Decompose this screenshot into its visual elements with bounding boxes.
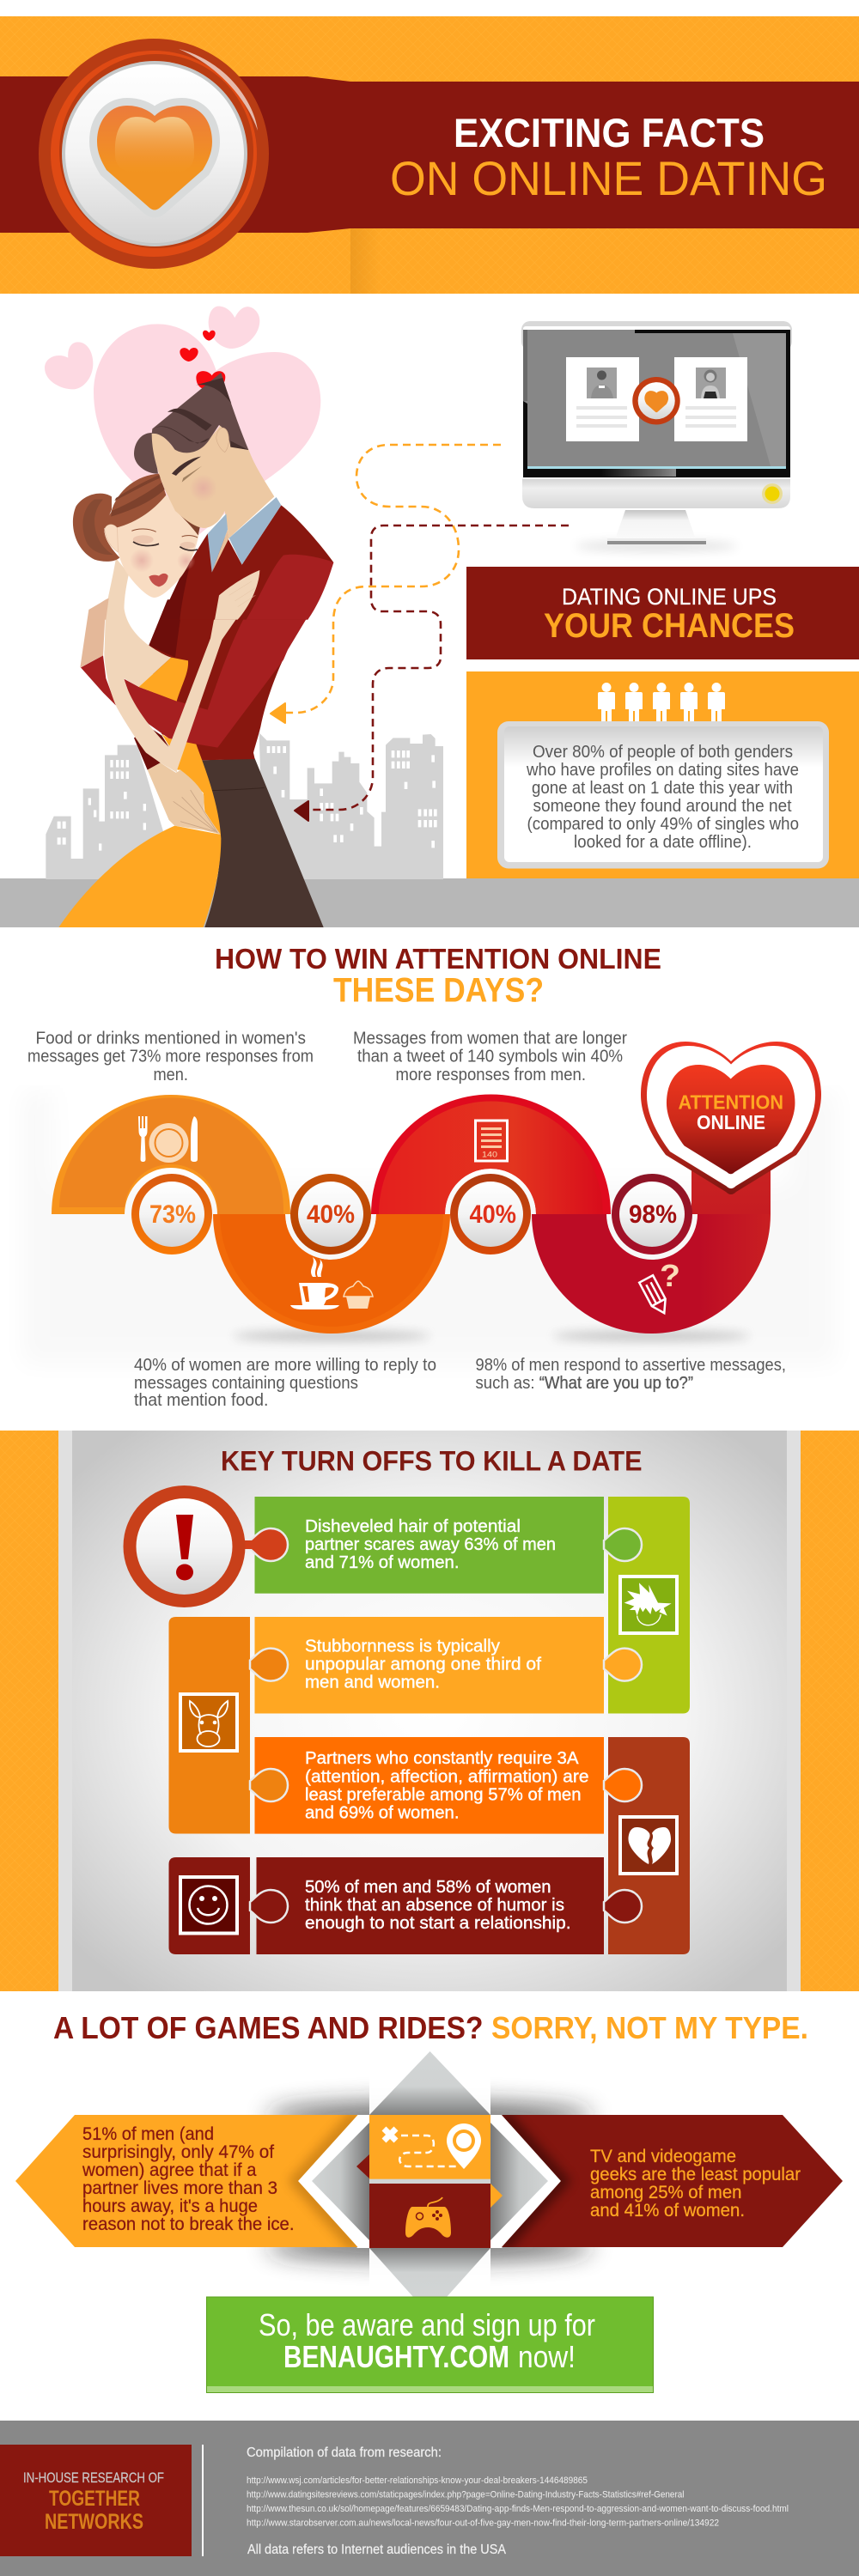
text: longer messages: more responses from men.: [395, 1065, 586, 1084]
row: 3A partners: [250, 1737, 642, 1834]
sources: Compilation of data from research:: [247, 2445, 442, 2460]
panel: dating online ups your chances: [466, 567, 859, 659]
research credit box: [0, 2445, 192, 2556]
panel: key turn offs: [0, 1431, 859, 1991]
heading: how to win attention: [215, 943, 661, 1010]
heading: games and rides: A LOT OF GAMES AND RIDES?: [53, 2010, 483, 2045]
text: longer messages: Messages from women that are longer: [353, 1029, 627, 1048]
statistic text: someone they found around the net: [533, 797, 792, 816]
icon: pencil and question mark: [639, 1258, 680, 1316]
title: ON ONLINE DATING: [390, 151, 827, 205]
row: disheveled hair: partner scares away 63% of men: [305, 1534, 556, 1554]
call to action: BENAUGHTY.COM: [283, 2339, 509, 2374]
badge: 40 percent food: [290, 1174, 371, 1255]
red top arch with document icon: [371, 1094, 611, 1214]
row: disheveled hair: [254, 1497, 642, 1594]
orange top arch with plate icon: [52, 1095, 290, 1214]
title: EXCITING FACTS: [454, 110, 765, 155]
title: [390, 110, 827, 205]
text: longer messages: than a tweet of 140 symbols win 40%: [357, 1047, 623, 1066]
icon: broken heart: [620, 1817, 677, 1874]
icon: messy hair: [620, 1577, 677, 1633]
icon: fork plate knife: [138, 1116, 198, 1163]
heading: how to win attention: HOW TO WIN ATTENTION ONLINE: [215, 943, 661, 975]
sources: All data refers to Internet audiences in the USA: [247, 2543, 507, 2557]
research credit box: NETWORKS: [45, 2510, 143, 2534]
soft background glow: [0, 1030, 859, 1365]
sources: http://www.datingsitesreviews.com/staticpages/index.php?page=Online-Dating-Industry-Facts-Statistics#ref-General: [247, 2490, 684, 2500]
call to action: now!: [518, 2339, 576, 2374]
statistic text: who have profiles on dating sites have: [526, 761, 799, 780]
dashed arrow: orange: [271, 445, 501, 723]
arrow panel: geeks: and 41% of women.: [590, 2201, 745, 2221]
text: assertive messages: [476, 1355, 786, 1393]
text: food or drinks: men.: [153, 1065, 188, 1084]
arrow panel: geeks: among 25% of men: [590, 2183, 742, 2202]
arrow panel: distance: 51% of men (and: [82, 2124, 214, 2144]
icon: smile: [180, 1877, 237, 1934]
call to action: So, be aware and sign up for: [259, 2307, 595, 2342]
arrow panel: distance: partner lives more than 3: [82, 2178, 277, 2198]
row: 3A partners: least preferable among 57% of men: [305, 1784, 581, 1805]
text: women reply: that mention food.: [134, 1390, 268, 1410]
orange bottom arch with coffee icon: [213, 1214, 450, 1334]
research credit box: TOGETHER: [49, 2487, 140, 2511]
sources: http://www.starobserver.com.au/news/local-news/four-out-of-five-gay-men-now-find-their-long-term-partners-online/134922: [247, 2518, 719, 2529]
statistic text: [526, 743, 799, 852]
row: 3A partners: Partners who constantly require 3A: [305, 1748, 579, 1768]
arrow panel: distance: reason not to break the ice.: [82, 2215, 294, 2234]
dashed arrow: dark red: [295, 526, 569, 821]
shadows under wave: [233, 1331, 750, 1341]
header banner: [0, 16, 859, 294]
badge: 73 percent: [131, 1174, 212, 1255]
white and grey chevrons: [298, 2115, 561, 2248]
row: disheveled hair: Disheveled hair of potential: [305, 1516, 521, 1536]
arrow panel: geeks: TV and videogame: [590, 2147, 736, 2166]
icon: pencil and question mark: ?: [660, 1258, 680, 1293]
icon: donkey: [180, 1694, 237, 1751]
grey diamond top and bottom: [369, 2051, 490, 2297]
text: longer messages: [353, 1029, 627, 1084]
footer: [0, 2421, 859, 2576]
badge: 98 percent: [612, 1174, 692, 1255]
sources: http://www.thesun.co.uk/sol/homepage/features/6659483/Dating-app-finds-Men-respond-to-aggression-and-women-want-to-discuss-food.html: [247, 2504, 789, 2514]
sources: http://www.wsj.com/articles/for-better-relationships-know-your-deal-breakers-1446489865: [247, 2476, 588, 2486]
header orange background: [0, 16, 859, 294]
wave chart: [0, 1030, 859, 1365]
icon: exclamation badge with connector: [124, 1485, 288, 1607]
woman's face features: [130, 529, 198, 586]
center tile: route: [356, 2115, 490, 2184]
research credit box: IN-HOUSE RESEARCH OF: [23, 2470, 164, 2486]
couple upper bodies and faces: [73, 373, 333, 620]
center tile: games: [369, 2184, 503, 2248]
heading: key turn offs: KEY TURN OFFS TO KILL A DATE: [221, 1446, 643, 1477]
statistic text: gone at least on 1 date this year with: [532, 779, 793, 798]
panel: dating online ups your chances: YOUR CHANCES: [544, 607, 795, 645]
crimson bottom arch with pencil icon: [532, 1151, 771, 1334]
statistic text: Over 80% of people of both genders: [533, 743, 793, 762]
arrow panel: distance: women) agree that if a: [82, 2160, 257, 2180]
side panels: [168, 1497, 690, 1954]
arrow panel: distance: [15, 2115, 357, 2247]
row: stubbornness: unpopular among one third of: [305, 1654, 541, 1674]
arrow panel: distance: surprisingly, only 47% of: [82, 2142, 274, 2162]
row: 3A partners: and 69% of women.: [305, 1803, 459, 1822]
badge: 40 percent food: 40%: [307, 1200, 355, 1229]
small heart badge: [632, 377, 680, 424]
row: absence of humor: think that an absence of humor is: [305, 1895, 564, 1915]
heart: attention online: [641, 1042, 821, 1194]
text: food or drinks: [27, 1029, 314, 1084]
row: stubbornness: Stubbornness is typically: [305, 1637, 501, 1656]
arrow panel: geeks: geeks are the least popular: [590, 2165, 801, 2184]
badge: 40 percent tweet: [450, 1174, 531, 1255]
heart: attention online: ONLINE: [697, 1111, 765, 1133]
couple lower bodies: [58, 599, 324, 927]
badge: 73 percent: 73%: [149, 1200, 196, 1229]
text: women reply: 40% of women are more willing to reply to: [134, 1355, 436, 1375]
icon: game controller: [405, 2197, 451, 2238]
icon: route with map pin: [384, 2123, 481, 2169]
arrow panel: geeks: [502, 2115, 843, 2247]
row: disheveled hair: and 71% of women.: [305, 1552, 459, 1572]
text: food or drinks: messages get 73% more responses from: [27, 1047, 314, 1066]
city skyline: [46, 732, 443, 879]
badge: 40 percent tweet: 40%: [469, 1200, 516, 1229]
statistic text: looked for a date offline).: [574, 833, 752, 852]
text: assertive messages: such as: “What are you up to?”: [476, 1373, 693, 1393]
statistic text: (compared to only 49% of singles who: [527, 815, 799, 834]
profile card: man: [566, 357, 639, 441]
text: women reply: [134, 1355, 436, 1410]
badge: 98 percent: 98%: [629, 1200, 677, 1229]
heading: games and rides: SORRY, NOT MY TYPE.: [491, 2010, 808, 2045]
arrow panel: distance: hours away, it's a huge: [82, 2196, 258, 2216]
text: assertive messages: 98% of men respond to assertive messages,: [476, 1355, 786, 1375]
panel: dating online ups your chances: DATING ONLINE UPS: [562, 584, 777, 610]
icon: computer monitor: [521, 321, 792, 551]
icon: five people: [598, 683, 725, 721]
header ribbon: [0, 76, 859, 233]
heart: attention online: ATTENTION: [679, 1091, 783, 1113]
header heart badge: [39, 39, 269, 269]
text: food or drinks: Food or drinks mentioned in women's: [36, 1029, 306, 1048]
heading: games and rides: [53, 2010, 808, 2045]
vertical white strip: [369, 2040, 490, 2297]
panel: 80 percent statistic: [466, 671, 859, 878]
icon: 140 symbol document: 140: [482, 1151, 497, 1159]
profile card: woman: [674, 357, 747, 441]
band shadows: [266, 2103, 593, 2260]
ground strip: [0, 878, 859, 927]
sources: [247, 2445, 789, 2557]
row: absence of humor: 50% of men and 58% of women: [305, 1877, 551, 1897]
icon: 140 symbol document: [476, 1121, 507, 1161]
text: women reply: messages containing questions: [134, 1373, 358, 1393]
row: 3A partners: (attention, affection, affirmation) are: [305, 1767, 589, 1786]
couple illustration with city: [0, 307, 859, 927]
row: stubbornness: men and women.: [305, 1673, 440, 1692]
icon: coffee and cupcake: [290, 1257, 373, 1309]
pink hearts and red hearts: [45, 307, 320, 538]
row: absence of humor: enough to not start a relationship.: [305, 1913, 570, 1933]
call to action: [206, 2297, 653, 2392]
diagram: games and rides: [15, 2040, 843, 2297]
heading: how to win attention: THESE DAYS?: [333, 972, 544, 1010]
row: stubbornness: [250, 1617, 642, 1714]
row: absence of humor: [250, 1857, 642, 1954]
